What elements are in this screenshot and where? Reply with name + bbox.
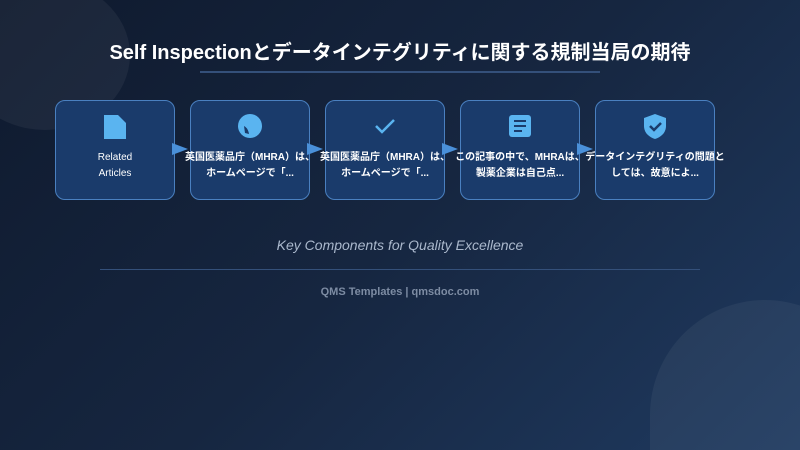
box 3: 英国医薬品庁（MHRA）は、: [320, 152, 450, 163]
arrow 4: [577, 143, 593, 155]
icon: globe: [238, 114, 262, 138]
icon: shield: [644, 114, 666, 139]
arrow 3: [442, 143, 458, 155]
footer: QMS Templates | qmsdoc.com: [321, 286, 479, 298]
box 1: [55, 100, 175, 200]
box 2: [190, 100, 310, 200]
box 1: Articles: [99, 168, 131, 179]
box 2: ホームページで「...: [206, 168, 294, 179]
box 5: しては、故意によ...: [611, 168, 699, 179]
box 5: [595, 100, 715, 200]
icon: file: [104, 115, 126, 139]
box 3: ホームページで「...: [341, 168, 429, 179]
arrow 1: [172, 143, 188, 155]
box 2: 英国医薬品庁（MHRA）は、: [185, 152, 315, 163]
box 4: この記事の中で、MHRAは、: [455, 152, 585, 163]
icon: check: [375, 119, 395, 134]
box 4: [460, 100, 580, 200]
title: Self Inspectionとデータインテグリティに関する規制当局の期待: [109, 42, 691, 64]
box 5: データインテグリティの問題と: [585, 152, 725, 163]
icon: document: [509, 115, 531, 137]
box 1: Related: [98, 152, 132, 163]
box 4: 製薬企業は自己点...: [476, 168, 564, 179]
arrow 2: [307, 143, 323, 155]
box 3: [325, 100, 445, 200]
subtitle: Key Components for Quality Excellence: [277, 237, 523, 253]
